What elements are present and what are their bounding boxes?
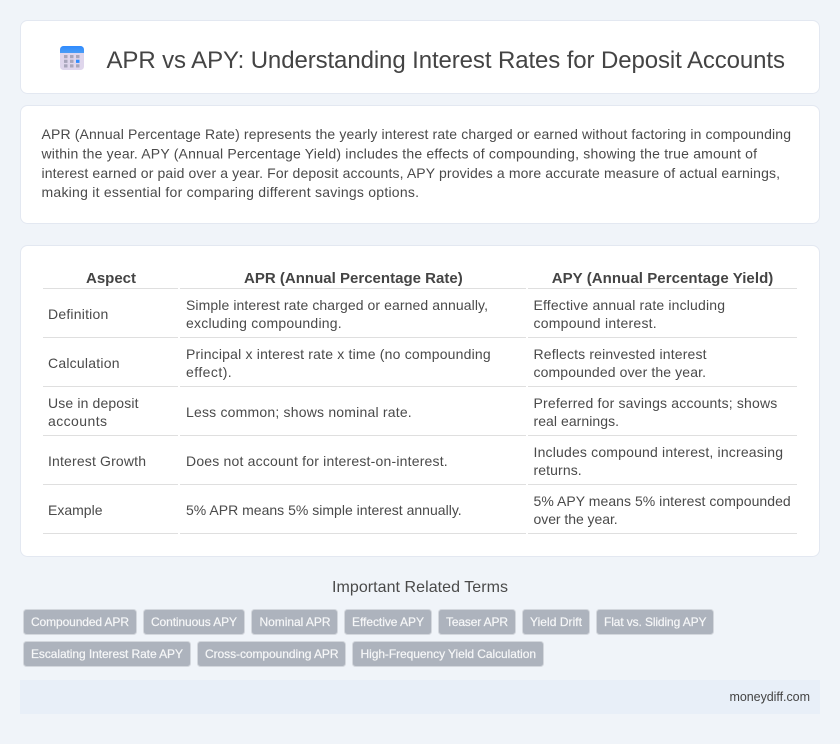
tag: Effective APY: Effective APY: [352, 615, 424, 629]
intro text: interest earned or paid over a year. For deposit accounts, APY provides a more accurate measure of actual earnings,: [42, 165, 780, 181]
tag: Teaser APR: [438, 610, 516, 634]
row: interest growth: Does not account for interest-on-interest.: [186, 453, 448, 469]
comparison table panel: [20, 246, 820, 556]
row: calculation: effect).: [186, 364, 232, 380]
intro text: making it essential for comparing different savings options.: [42, 184, 419, 200]
tag: Cross-compounding APR: Cross-compounding APR: [205, 647, 339, 661]
row: example: Example: [48, 502, 103, 518]
row: example: [48, 493, 791, 527]
footer source text: moneydiff.com: [730, 690, 810, 704]
tag: High-Frequency Yield Calculation: High-Frequency Yield Calculation: [360, 647, 536, 661]
row: definition: excluding compounding.: [186, 315, 342, 331]
row: definition: Simple interest rate charged or earned annually,: [186, 297, 488, 313]
tag: Continuous APY: [144, 610, 244, 634]
table header: [86, 270, 773, 287]
footer bar: [20, 680, 820, 714]
icon: calendar: [60, 46, 84, 70]
title: APR vs APY: Understanding Interest Rates for Deposit Accounts: [106, 47, 785, 74]
row: interest growth: returns.: [534, 462, 582, 478]
tag: Yield Drift: Yield Drift: [530, 615, 583, 629]
table header: APR (Annual Percentage Rate): [244, 270, 463, 287]
row: use in deposit accounts: Use in deposit: [48, 395, 139, 411]
tag: Continuous APY: Continuous APY: [151, 615, 237, 629]
row: definition: Effective annual rate including: [534, 297, 725, 313]
row: use in deposit accounts: Less common; shows nominal rate.: [186, 404, 412, 420]
tag: Yield Drift: [522, 610, 590, 634]
tag: Flat vs. Sliding APY: Flat vs. Sliding APY: [604, 615, 706, 629]
tag: Compounded APR: [24, 610, 136, 634]
row: calculation: Principal x interest rate x time (no compounding: [186, 346, 491, 362]
row: use in deposit accounts: [48, 395, 777, 429]
row: calculation: Reflects reinvested interest: [534, 346, 707, 362]
row: definition: [48, 297, 725, 331]
header panel: [20, 20, 820, 94]
tag: Compounded APR: Compounded APR: [31, 615, 129, 629]
row: example: over the year.: [534, 511, 618, 527]
tag: Cross-compounding APR: [198, 642, 346, 666]
table header: Aspect: [86, 270, 136, 287]
row: calculation: [48, 346, 707, 380]
row: example: 5% APR means 5% simple interest annually.: [186, 502, 462, 518]
tag: Teaser APR: Teaser APR: [446, 615, 508, 629]
tag: High-Frequency Yield Calculation: [352, 642, 544, 666]
tag: Escalating Interest Rate APY: Escalating Interest Rate APY: [31, 647, 183, 661]
row: use in deposit accounts: accounts: [48, 413, 107, 429]
row: use in deposit accounts: Preferred for savings accounts; shows: [534, 395, 777, 411]
tag: Effective APY: [344, 610, 432, 634]
intro text: within the year. APY (Annual Percentage Yield) includes the effects of compounding, showing the true amount of: [40, 145, 757, 161]
related terms tags: [24, 610, 714, 666]
intro panel: [20, 106, 820, 224]
tag: Nominal APR: [252, 610, 338, 634]
row: interest growth: Interest Growth: [48, 453, 146, 469]
intro text: APR (Annual Percentage Rate) represents the yearly interest rate charged or earned without factoring in compounding: [42, 126, 791, 142]
row: example: 5% APY means 5% interest compounded: [534, 493, 791, 509]
intro text: [40, 126, 791, 200]
row: interest growth: Includes compound interest, increasing: [534, 444, 783, 460]
tag: Escalating Interest Rate APY: [24, 642, 190, 666]
row: definition: compound interest.: [534, 315, 657, 331]
row: definition: Definition: [48, 306, 108, 322]
row: calculation: Calculation: [48, 355, 120, 371]
tag: Flat vs. Sliding APY: [596, 610, 714, 634]
tag: Nominal APR: Nominal APR: [260, 615, 331, 629]
related terms heading: Important Related Terms: [332, 579, 508, 596]
row: calculation: compounded over the year.: [534, 364, 706, 380]
row: interest growth: [48, 444, 783, 478]
table header: APY (Annual Percentage Yield): [552, 270, 773, 287]
row: use in deposit accounts: real earnings.: [534, 413, 619, 429]
